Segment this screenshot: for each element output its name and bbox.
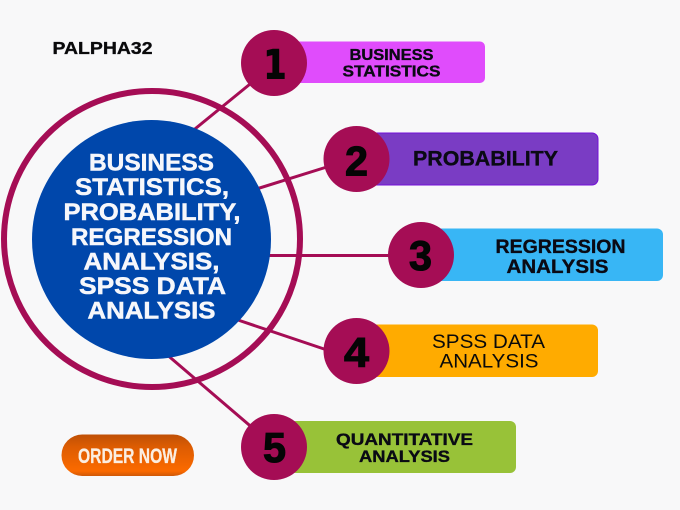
item 2: probability: 2 (345, 138, 368, 184)
item 4: spss data analysis: ANALYSIS (440, 352, 538, 372)
outer ring (4, 91, 300, 387)
central text: REGRESSION (71, 224, 232, 251)
central text: BUSINESS (89, 150, 214, 176)
item 1: business statistics (241, 30, 485, 96)
author label: PALPHA32 (52, 38, 153, 58)
item 5: quantitative analysis: 5 (263, 424, 286, 471)
item 2: probability (324, 126, 598, 192)
item 2: probability: PROBABILITY (413, 148, 558, 170)
central text (64, 150, 240, 324)
central circle with topic list (32, 120, 271, 359)
item 3: regression analysis: ANALYSIS (506, 256, 608, 278)
item 4: spss data analysis: 4 (344, 329, 370, 376)
item 5: quantitative analysis: QUANTITATIVE (336, 431, 473, 449)
connector lines (165, 80, 395, 430)
order now button: ORDER NOW (78, 444, 178, 468)
central text: ANALYSIS, (84, 248, 220, 276)
item 3: regression analysis: REGRESSION (496, 236, 626, 258)
item 3: regression analysis: 3 (409, 232, 432, 279)
central text: PROBABILITY, (64, 199, 240, 226)
item 4: spss data analysis (324, 318, 598, 384)
central text: STATISTICS, (75, 174, 229, 201)
item 5: quantitative analysis (241, 414, 516, 480)
item 1: business statistics: BUSINESS (350, 47, 434, 64)
item 1: business statistics: 1 (264, 42, 286, 88)
item 1: business statistics: STATISTICS (342, 64, 440, 80)
item 4: spss data analysis: SPSS DATA (432, 332, 545, 353)
item 3: regression analysis (388, 222, 663, 288)
item 5: quantitative analysis: ANALYSIS (359, 448, 450, 466)
central text: ANALYSIS (88, 298, 216, 324)
central text: SPSS DATA (79, 273, 226, 300)
order now button (62, 434, 194, 476)
